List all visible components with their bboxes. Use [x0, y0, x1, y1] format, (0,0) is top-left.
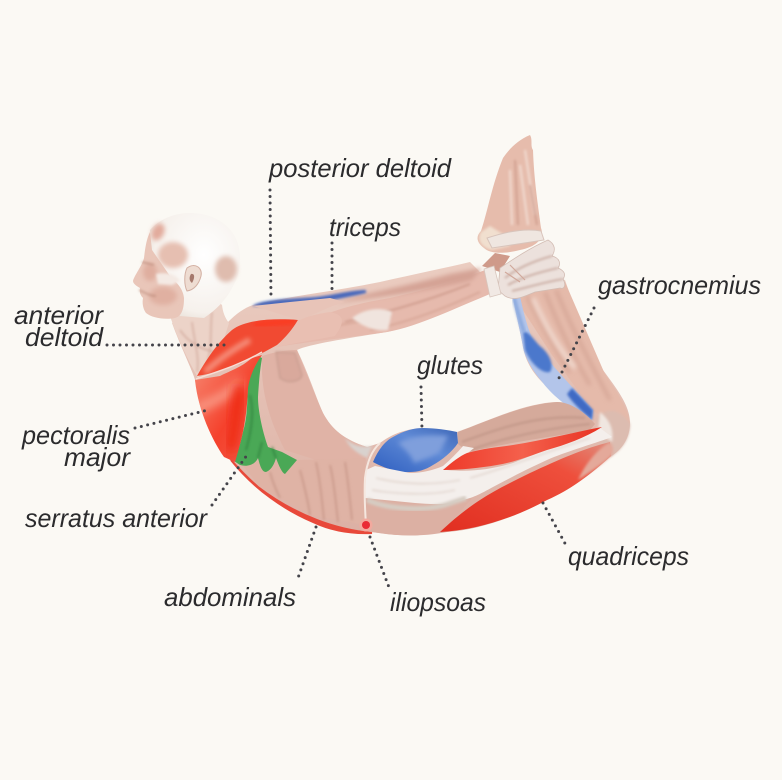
label: serratus anterior: serratus anterior [25, 503, 208, 533]
abdominal and iliac area [240, 458, 366, 525]
label: pectoralis major: pectoralis [21, 420, 130, 450]
facial muscles [143, 221, 237, 305]
wrist band [484, 266, 501, 297]
label: pectoralis major [21, 420, 131, 472]
label: abdominals: abdominals [164, 582, 296, 612]
ear [185, 266, 201, 291]
label: pectoralis major: major [64, 442, 131, 472]
hip tendon band [365, 428, 612, 504]
serratus anterior [234, 357, 297, 474]
figure: bow pose anatomy [133, 135, 630, 536]
label: anterior deltoid: anterior [14, 300, 104, 330]
other hand under wrist [482, 253, 510, 272]
abdominals [231, 460, 372, 533]
body: torso and legs base [172, 262, 630, 536]
label: triceps: triceps [329, 212, 401, 242]
knee [596, 411, 630, 457]
label: anterior deltoid [14, 300, 105, 352]
anterior hip [366, 497, 473, 535]
ankle band [487, 230, 544, 248]
leader lines [107, 190, 594, 590]
skull [150, 213, 240, 318]
glutes [373, 428, 458, 472]
upper arm lower border [277, 312, 342, 347]
lower leg [515, 282, 630, 457]
torso side [240, 350, 473, 535]
label: anterior deltoid: deltoid [25, 322, 105, 352]
label: iliopsoas: iliopsoas [390, 587, 486, 617]
foot [478, 135, 544, 253]
label: quadriceps: quadriceps [568, 541, 689, 571]
hamstrings [458, 402, 595, 452]
anterior deltoid [197, 319, 298, 376]
face [133, 232, 184, 319]
hand [484, 240, 565, 299]
label: posterior deltoid: posterior deltoid [268, 153, 453, 183]
iliopsoas marker [360, 518, 372, 532]
label: gastrocnemius: gastrocnemius [598, 270, 761, 300]
posterior deltoid and triceps [252, 290, 366, 306]
label: glutes: glutes [417, 350, 483, 380]
quadriceps upper [443, 427, 602, 470]
gastrocnemius [513, 296, 593, 420]
hip boundary line [365, 443, 380, 525]
neck [170, 296, 229, 378]
arm muscle shading [277, 270, 495, 347]
arm [252, 268, 495, 347]
head and neck [133, 213, 240, 378]
quadriceps lower [440, 442, 611, 532]
pectoralis major [195, 355, 262, 462]
